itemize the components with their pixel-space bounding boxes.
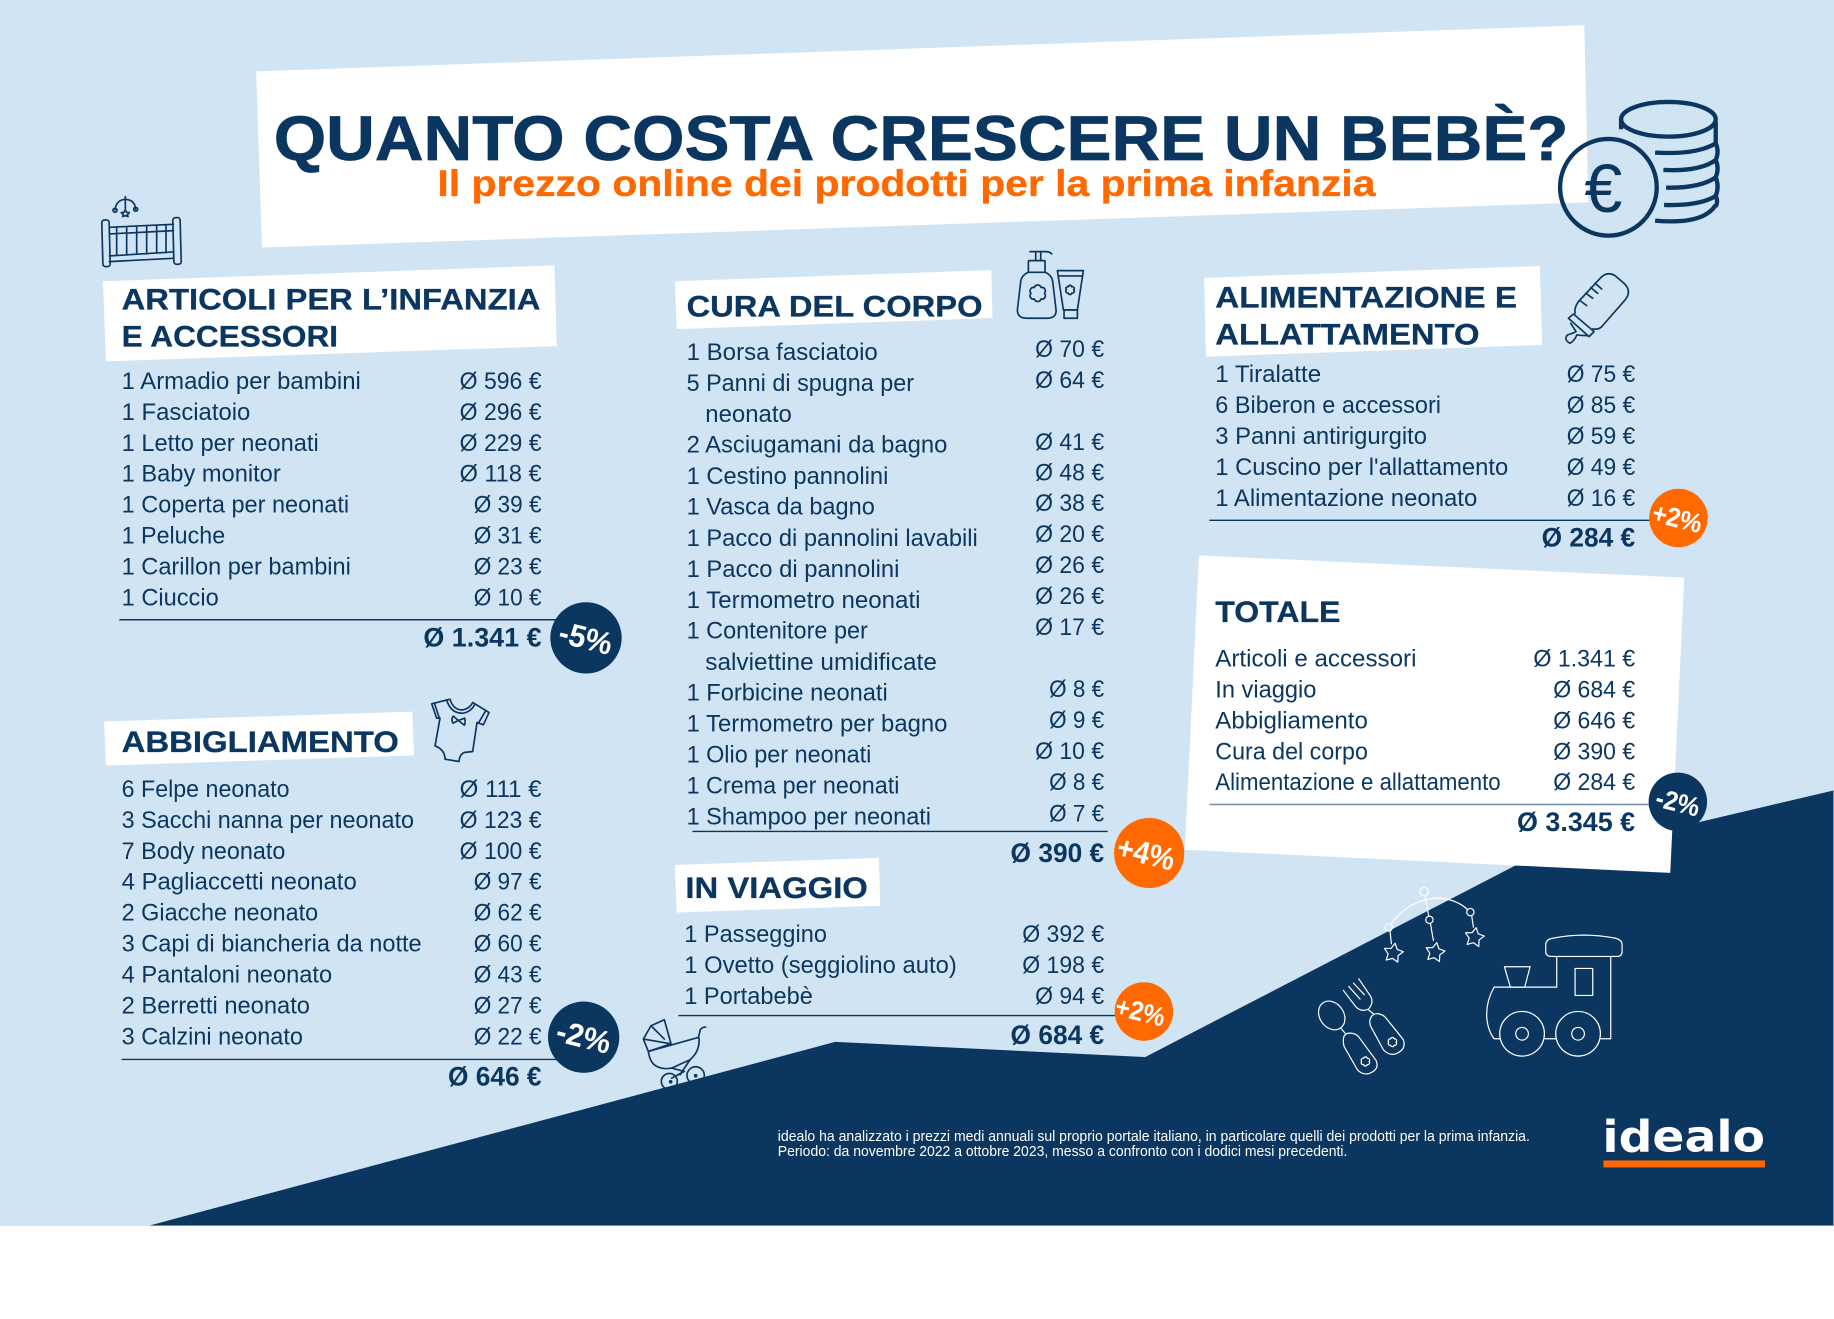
badge: -2%	[548, 1002, 619, 1073]
item list: articoli: Ø 23 €	[474, 553, 542, 580]
total: abbigliamento: Ø 646 €	[448, 1062, 542, 1092]
item list: articoli: Ø 39 €	[474, 492, 542, 519]
summary list: Ø 390 €	[1553, 738, 1635, 765]
item list: cura del corpo: 1 Crema per neonati	[687, 772, 899, 799]
summary list: Ø 284 €	[1553, 769, 1635, 796]
item list: cura del corpo: Ø 8 €	[1049, 676, 1104, 703]
item list: cura del corpo: Ø 26 €	[1035, 552, 1104, 579]
item list: cura del corpo: Ø 38 €	[1035, 490, 1104, 517]
item list: abbigliamento: 3 Sacchi nanna per neonato	[122, 807, 414, 834]
summary list: Ø 646 €	[1553, 707, 1635, 734]
item list: articoli: 1 Fasciatoio	[122, 399, 250, 426]
item list: abbigliamento: Ø 111 €	[460, 776, 542, 803]
item list: cura del corpo: 1 Forbicine neonati	[687, 679, 888, 706]
item list: cura del corpo: Ø 17 €	[1035, 614, 1104, 641]
item list: alimentazione: 1 Alimentazione neonato	[1215, 485, 1477, 512]
heading: articoli: ARTICOLI PER L’INFANZIA	[122, 284, 540, 317]
icon: baby mobile	[1385, 887, 1484, 962]
item list: cura del corpo	[687, 336, 1104, 830]
footnote: Periodo: da novembre 2022 a ottobre 2023, messo a confronto con i dodici mesi precedenti.	[778, 1144, 1347, 1160]
icon: crib	[102, 197, 181, 267]
footnote	[778, 1129, 1530, 1160]
item list: in viaggio: 1 Portabebè	[684, 983, 813, 1010]
panel: cura del corpo	[675, 270, 1184, 888]
item list: abbigliamento: Ø 97 €	[474, 869, 542, 896]
item list: cura del corpo: 1 Termometro neonati	[687, 587, 921, 614]
item list: articoli: Ø 229 €	[460, 430, 542, 457]
summary list: Ø 684 €	[1553, 677, 1635, 704]
item list: articoli: 1 Letto per neonati	[122, 430, 319, 457]
heading: abbigliamento: ABBIGLIAMENTO	[122, 726, 399, 759]
summary list: Ø 1.341 €	[1533, 646, 1635, 673]
item list: abbigliamento: Ø 43 €	[474, 962, 542, 989]
item list: alimentazione: Ø 85 €	[1567, 392, 1635, 419]
heading: alimentazione	[1215, 282, 1517, 351]
item list: cura del corpo: 1 Vasca da bagno	[687, 494, 875, 521]
item list: abbigliamento: Ø 22 €	[474, 1024, 542, 1051]
total: articoli: Ø 1.341 €	[423, 623, 542, 653]
badge: -5%	[550, 602, 622, 674]
item list: alimentazione: Ø 59 €	[1567, 423, 1635, 450]
item list: articoli: 1 Carillon per bambini	[122, 553, 351, 580]
item list: cura del corpo: Ø 8 €	[1049, 769, 1104, 796]
item list: cura del corpo: Ø 9 €	[1049, 707, 1104, 734]
heading: alimentazione: ALIMENTAZIONE E	[1215, 282, 1517, 315]
panel: in viaggio	[675, 858, 1173, 1050]
item list: articoli: Ø 31 €	[474, 523, 542, 550]
item list: articoli: 1 Coperta per neonati	[122, 492, 349, 519]
heading: articoli	[122, 284, 540, 353]
heading: totale: TOTALE	[1215, 596, 1340, 629]
item list: cura del corpo: 1 Borsa fasciatoio	[687, 339, 878, 366]
panel: abbigliamento	[104, 712, 619, 1092]
item list: in viaggio: Ø 94 €	[1035, 983, 1104, 1010]
item list: articoli: Ø 596 €	[460, 368, 542, 395]
item list: in viaggio: 1 Passeggino	[684, 921, 827, 948]
item list: cura del corpo: 1 Termometro per bagno	[687, 710, 947, 737]
badge: -5%: -5%	[555, 614, 616, 662]
item list: abbigliamento: 3 Capi di biancheria da notte	[122, 931, 422, 958]
logo: idealo: idealo	[1602, 1111, 1765, 1162]
item list: articoli: 1 Armadio per bambini	[122, 368, 361, 395]
icon: pram	[643, 1020, 706, 1089]
item list: cura del corpo: neonato	[705, 401, 792, 428]
item list: abbigliamento: Ø 60 €	[474, 931, 542, 958]
item list: cura del corpo: 2 Asciugamani da bagno	[687, 432, 947, 459]
grand total: Ø 3.345 €	[1517, 807, 1635, 837]
title banner	[256, 25, 1588, 248]
heading: in viaggio: IN VIAGGIO	[685, 872, 868, 905]
item list: articoli: Ø 10 €	[474, 584, 542, 611]
badge: +2%: +2%	[1649, 498, 1705, 539]
item list: alimentazione: Ø 75 €	[1567, 361, 1635, 388]
item list: abbigliamento: Ø 100 €	[460, 838, 542, 865]
badge: +2%: +2%	[1112, 991, 1168, 1032]
badge: -2%	[1649, 773, 1707, 831]
item list: alimentazione: Ø 49 €	[1567, 454, 1635, 481]
title: QUANTO COSTA CRESCERE UN BEBÈ?	[274, 104, 1568, 174]
panel: articoli per l'infanzia	[103, 265, 622, 674]
item list: cura del corpo: 1 Cestino pannolini	[687, 463, 888, 490]
item list: in viaggio: 1 Ovetto (seggiolino auto)	[684, 952, 957, 979]
icon: coins	[1560, 102, 1718, 236]
item list: abbigliamento: 6 Felpe neonato	[122, 776, 289, 803]
item list: in viaggio: Ø 392 €	[1022, 921, 1104, 948]
item list: abbigliamento: Ø 27 €	[474, 993, 542, 1020]
item list: cura del corpo: 5 Panni di spugna per	[687, 370, 914, 397]
item list: alimentazione: 1 Cuscino per l'allattamento	[1215, 454, 1508, 481]
item list: articoli: Ø 296 €	[460, 399, 542, 426]
summary list: In viaggio	[1215, 677, 1316, 704]
item list: in viaggio	[684, 921, 1104, 1010]
item list: cura del corpo: 1 Pacco di pannolini lavabili	[687, 525, 978, 552]
heading: alimentazione: ALLATTAMENTO	[1215, 318, 1480, 351]
item list: cura del corpo: Ø 64 €	[1035, 367, 1104, 394]
item list: alimentazione: Ø 16 €	[1567, 485, 1635, 512]
icon: cosmetics	[1017, 252, 1083, 318]
item list: abbigliamento: 4 Pantaloni neonato	[122, 962, 332, 989]
item list: abbigliamento: 3 Calzini neonato	[122, 1024, 303, 1051]
total: alimentazione: Ø 284 €	[1542, 523, 1635, 553]
item list: cura del corpo: Ø 41 €	[1035, 429, 1104, 456]
heading: cura del corpo: CURA DEL CORPO	[687, 291, 982, 324]
total: in viaggio: Ø 684 €	[1011, 1020, 1104, 1050]
total: cura del corpo: Ø 390 €	[1011, 838, 1104, 868]
item list: cura del corpo: 1 Contenitore per	[687, 617, 868, 644]
item list: abbigliamento: 7 Body neonato	[122, 838, 285, 865]
item list: abbigliamento: Ø 62 €	[474, 900, 542, 927]
item list: articoli: Ø 118 €	[460, 461, 542, 488]
item list: articoli: 1 Baby monitor	[122, 461, 281, 488]
item list: articoli: 1 Ciuccio	[122, 584, 219, 611]
badge: -2%: -2%	[553, 1013, 615, 1061]
item list: cura del corpo: salviettine umidificate	[705, 649, 937, 676]
item list: cura del corpo: Ø 70 €	[1035, 336, 1104, 363]
heading: articoli: E ACCESSORI	[122, 320, 338, 353]
summary list: Abbigliamento	[1215, 707, 1368, 734]
item list: abbigliamento: 2 Berretti neonato	[122, 993, 310, 1020]
item list: articoli: 1 Peluche	[122, 523, 225, 550]
panel: alimentazione e allattamento	[1204, 266, 1708, 553]
item list: abbigliamento: 4 Pagliaccetti neonato	[122, 869, 357, 896]
item list: abbigliamento: 2 Giacche neonato	[122, 900, 318, 927]
item list: cura del corpo: Ø 10 €	[1035, 738, 1104, 765]
icon: coins: €	[1584, 151, 1622, 227]
item list: cura del corpo: 1 Pacco di pannolini	[687, 556, 899, 583]
item list: alimentazione: 1 Tiralatte	[1215, 361, 1321, 388]
item list: alimentazione: 3 Panni antirigurgito	[1215, 423, 1427, 450]
summary list: Alimentazione e allattamento	[1215, 769, 1501, 796]
item list: articoli	[122, 368, 542, 611]
item list: cura del corpo: Ø 7 €	[1049, 800, 1104, 827]
summary list	[1215, 646, 1635, 796]
item list: cura del corpo: Ø 20 €	[1035, 521, 1104, 548]
item list: alimentazione	[1215, 361, 1635, 512]
item list: cura del corpo: 1 Olio per neonati	[687, 741, 871, 768]
icon: baby bottle	[1566, 274, 1628, 343]
icon: onesie	[432, 699, 489, 761]
dark ground shape	[150, 790, 1833, 1225]
item list: cura del corpo: Ø 26 €	[1035, 583, 1104, 610]
item list: cura del corpo: Ø 48 €	[1035, 460, 1104, 487]
footnote: idealo ha analizzato i prezzi medi annuali sul proprio portale italiano, in particolare quelli dei prodotti per la prima infanzia.	[778, 1129, 1530, 1145]
panel: totale	[1185, 555, 1684, 873]
item list: alimentazione: 6 Biberon e accessori	[1215, 392, 1441, 419]
badge: -2%: -2%	[1653, 783, 1703, 823]
summary list: Cura del corpo	[1215, 738, 1368, 765]
summary list: Articoli e accessori	[1215, 646, 1416, 673]
icon: spoon and fork	[1313, 979, 1404, 1074]
badge: +4%: +4%	[1113, 829, 1179, 878]
item list: in viaggio: Ø 198 €	[1022, 952, 1104, 979]
item list: abbigliamento	[122, 776, 542, 1051]
item list: cura del corpo: 1 Shampoo per neonati	[687, 803, 931, 830]
item list: abbigliamento: Ø 123 €	[460, 807, 542, 834]
icon: toy train	[1487, 935, 1622, 1056]
subtitle: Il prezzo online dei prodotti per la prima infanzia	[437, 163, 1376, 204]
